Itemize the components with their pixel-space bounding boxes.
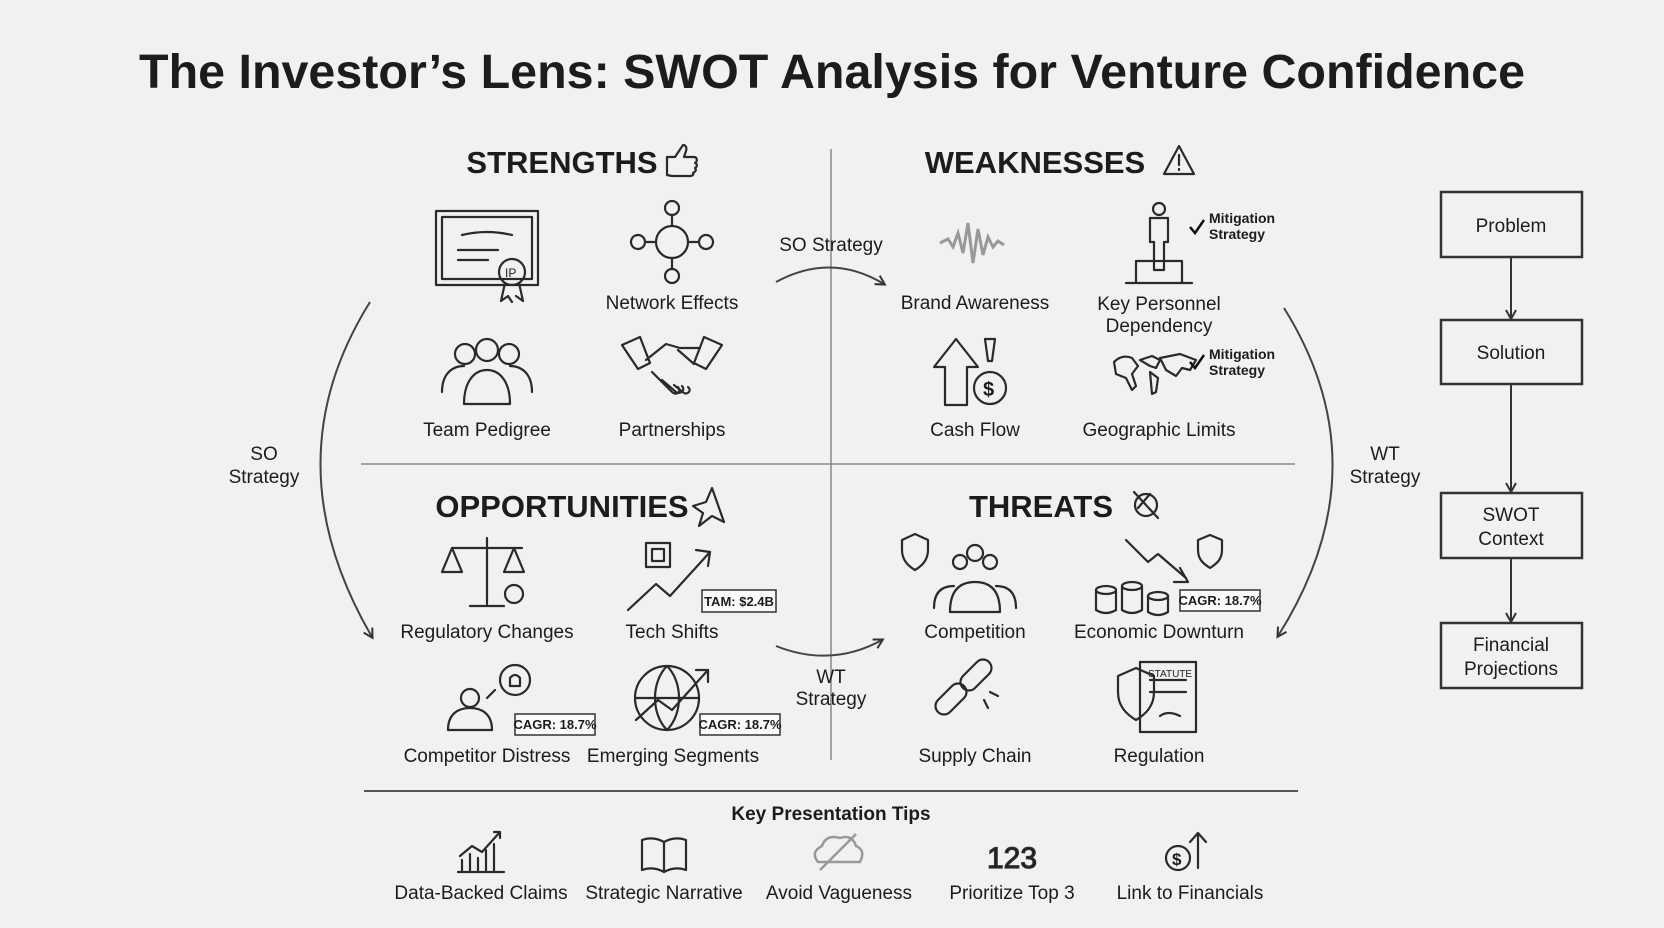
arrow: WT strategy right: WT	[1370, 444, 1400, 465]
label: partnerships: Partnerships	[619, 420, 725, 441]
label: competition: Competition	[924, 622, 1026, 643]
icon: competition	[902, 534, 1016, 612]
arrow: SO strategy left: SO	[250, 444, 278, 465]
callout: CAGR 1: CAGR: 18.7%	[513, 717, 597, 732]
panel: weaknesses	[901, 145, 1275, 441]
label: key personnel dependency: Dependency	[1106, 316, 1213, 337]
icon: partnerships	[622, 337, 722, 394]
heading: weaknesses: WEAKNESSES	[925, 145, 1145, 180]
arrow: WT strategy middle: Strategy	[796, 689, 867, 710]
arrow: SO strategy top: SO Strategy	[779, 235, 883, 256]
tip: strategic narrative	[585, 838, 743, 904]
label: emerging segments: Emerging Segments	[587, 746, 759, 767]
icon: key personnel	[1126, 203, 1192, 283]
arrow: SO strategy left	[229, 302, 372, 637]
icon: geographic limits	[1114, 354, 1196, 394]
icon: team pedigree	[442, 339, 532, 404]
box: financial projections	[1441, 623, 1582, 688]
flowchart	[1441, 192, 1582, 688]
icon: regulation: STATUTE	[1148, 669, 1192, 680]
box: solution	[1441, 320, 1582, 384]
icon: tech shifts	[628, 543, 710, 610]
label: regulation: Regulation	[1114, 746, 1204, 767]
icon: certificate	[436, 211, 538, 302]
icon: regulatory changes	[442, 538, 524, 606]
tip: avoid vagueness	[766, 834, 912, 904]
tip: strategic narrative: Strategic Narrative	[585, 883, 743, 904]
box: problem	[1441, 192, 1582, 257]
callout: TAM: TAM: $2.4B	[704, 594, 774, 609]
callout: CAGR 3: CAGR: 18.7%	[1178, 593, 1262, 608]
arrow: SO strategy left: Strategy	[229, 467, 300, 488]
arrow: WT strategy middle	[776, 640, 882, 710]
label: tech shifts: Tech Shifts	[626, 622, 718, 643]
panel: threats	[902, 489, 1262, 767]
box: financial projections: Financial	[1473, 635, 1549, 656]
box: solution: Solution	[1477, 343, 1545, 364]
title: The Investor’s Lens: SWOT Analysis for Venture Confidence	[139, 46, 1525, 99]
icon: competitor distress	[448, 665, 530, 730]
panel: strengths	[423, 145, 738, 441]
icon: emerging segments	[635, 666, 708, 730]
icon: cash flow	[934, 339, 1006, 405]
label: brand awareness: Brand Awareness	[901, 293, 1049, 314]
tip: data-backed claims: Data-Backed Claims	[394, 883, 568, 904]
arrow: solution to swot	[1510, 384, 1512, 491]
callout: mitigation strategy 1: Mitigation	[1209, 210, 1275, 226]
box: swot context	[1441, 493, 1582, 558]
arrow: WT strategy middle: WT	[816, 667, 846, 688]
box: swot context: Context	[1478, 529, 1544, 550]
arrow: WT strategy right: Strategy	[1350, 467, 1421, 488]
tip: prioritize top 3: 123	[987, 842, 1037, 875]
label: team pedigree: Team Pedigree	[423, 420, 551, 441]
box: problem: Problem	[1476, 216, 1546, 237]
icon: brand awareness	[940, 223, 1004, 263]
box: financial projections: Projections	[1464, 659, 1558, 680]
tip: link to financials	[1117, 833, 1263, 904]
arrow: WT strategy right	[1278, 308, 1421, 636]
section: key presentation tips	[394, 804, 1263, 904]
callout: CAGR 2: CAGR: 18.7%	[698, 717, 782, 732]
heading: strengths: STRENGTHS	[466, 145, 658, 180]
label: key personnel dependency	[1097, 294, 1221, 337]
label: economic downturn: Economic Downturn	[1074, 622, 1244, 643]
callout: mitigation strategy 2	[1190, 346, 1275, 378]
heading: key presentation tips: Key Presentation Tips	[731, 804, 931, 825]
label: geographic limits: Geographic Limits	[1082, 420, 1236, 441]
tip: prioritize top 3	[949, 842, 1075, 904]
callout: mitigation strategy 2: Strategy	[1209, 362, 1265, 378]
label: supply chain: Supply Chain	[918, 746, 1032, 767]
callout: mitigation strategy 1: Strategy	[1209, 226, 1265, 242]
arrow: problem to solution	[1510, 257, 1512, 318]
arrow: SO strategy top	[776, 235, 884, 284]
tip: avoid vagueness: Avoid Vagueness	[766, 883, 912, 904]
tip: data-backed claims	[394, 832, 568, 904]
icon: certificate: IP	[505, 266, 516, 280]
label: cash flow: Cash Flow	[930, 420, 1020, 441]
callout: TAM	[702, 590, 776, 612]
heading: opportunities: OPPORTUNITIES	[435, 489, 689, 524]
icon: network effects	[631, 201, 713, 283]
icon: cash flow: $	[983, 379, 994, 401]
box: swot context: SWOT	[1482, 505, 1540, 526]
heading: threats: THREATS	[969, 489, 1113, 524]
icon: supply chain	[936, 660, 998, 714]
label: regulatory changes: Regulatory Changes	[400, 622, 574, 643]
label: network effects: Network Effects	[606, 293, 738, 314]
icon: economic downturn	[1096, 535, 1222, 615]
panel: opportunities	[400, 488, 782, 767]
tip: link to financials: Link to Financials	[1117, 883, 1263, 904]
callout: mitigation strategy 2: Mitigation	[1209, 346, 1275, 362]
callout: mitigation strategy 1	[1190, 210, 1275, 242]
tip: prioritize top 3: Prioritize Top 3	[949, 883, 1075, 904]
tip: link to financials: $	[1172, 850, 1182, 869]
icon: regulation	[1118, 662, 1196, 732]
label: key personnel dependency: Key Personnel	[1097, 294, 1221, 315]
arrow: swot to financial	[1510, 558, 1512, 621]
label: competitor distress: Competitor Distress	[404, 746, 570, 767]
